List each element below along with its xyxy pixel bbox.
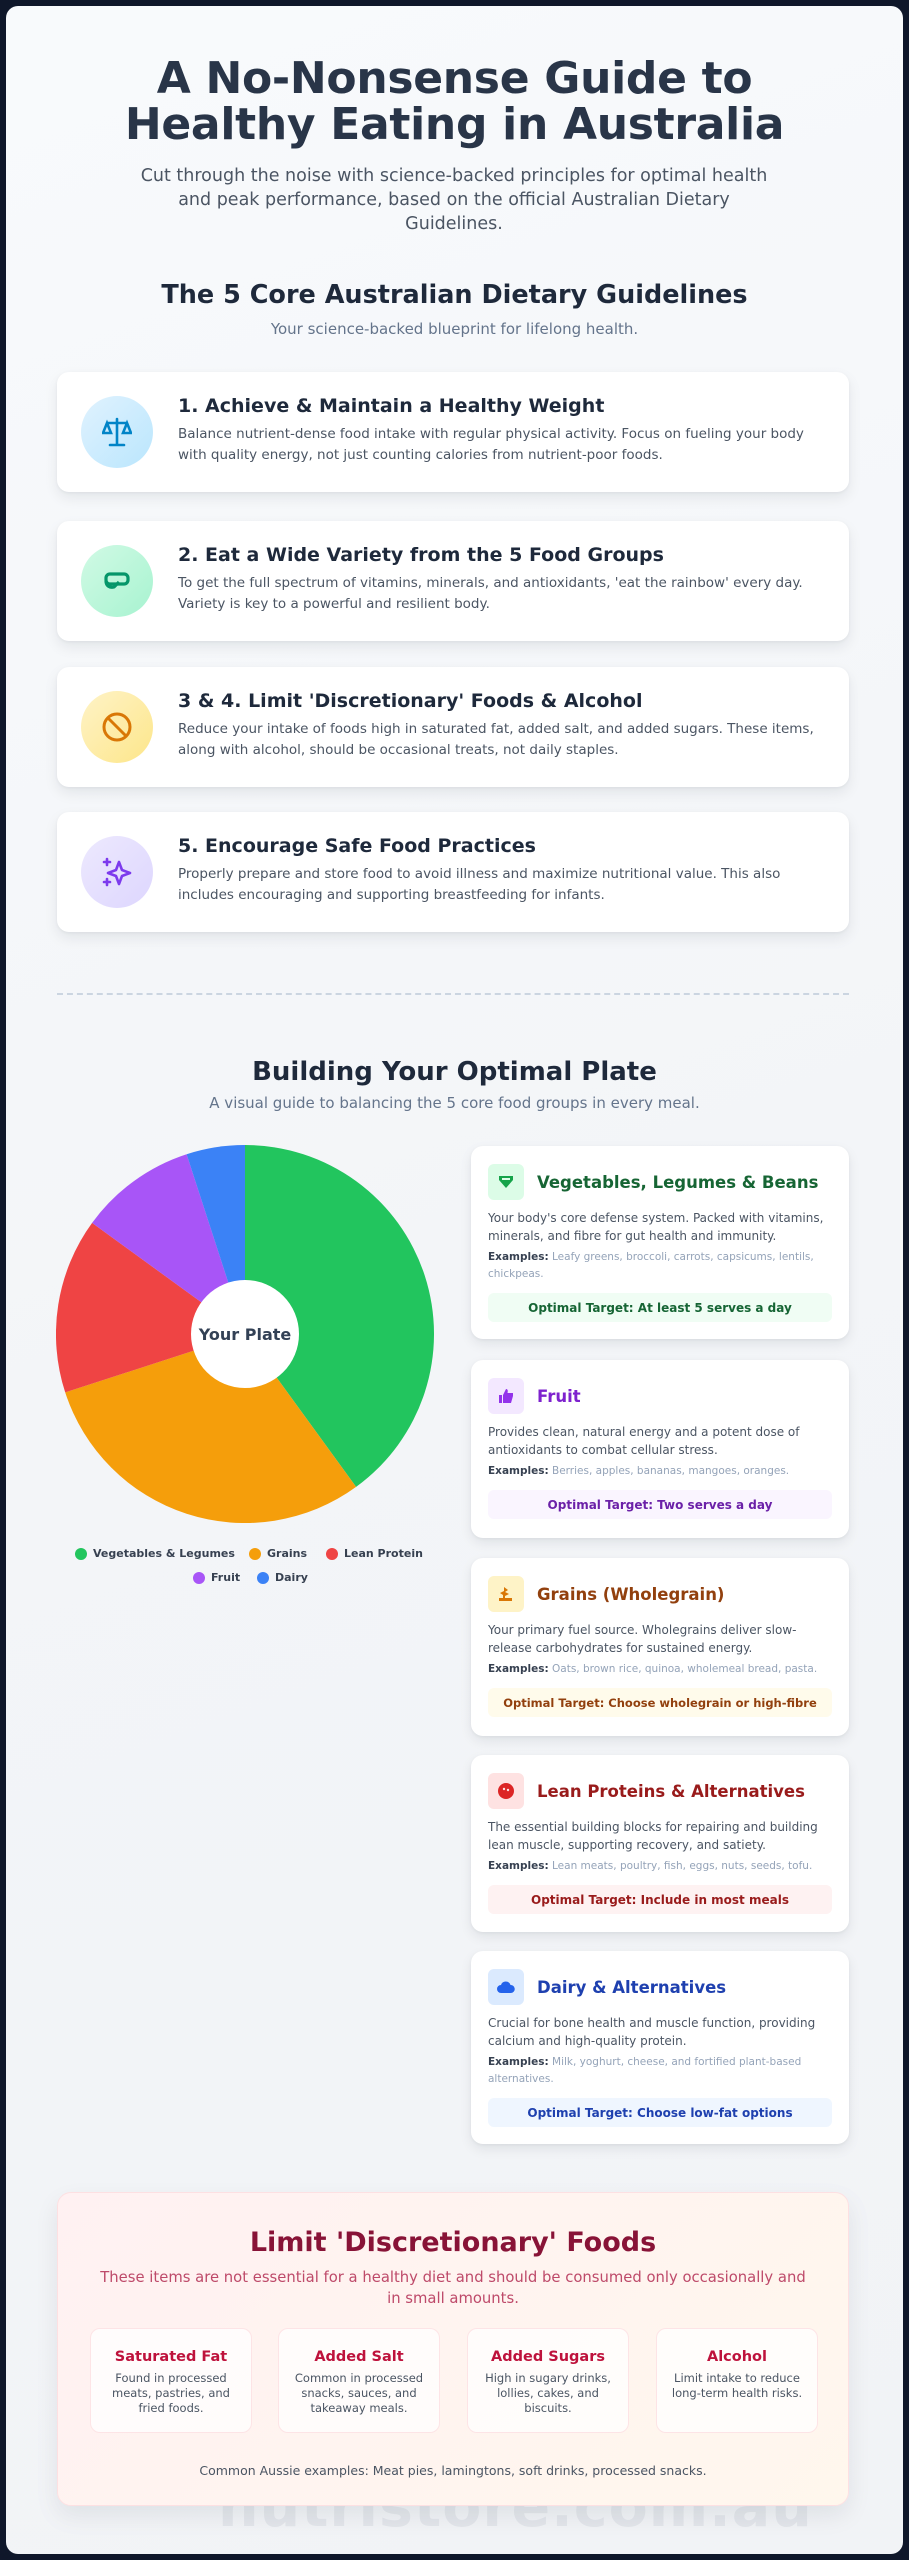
panel: grains: Examples: Oats, brown rice, quinoa, wholemeal bread, pasta. xyxy=(488,1663,817,1675)
icon: handshake xyxy=(81,545,153,617)
panel: grains: Grains (Wholegrain) xyxy=(537,1584,724,1604)
panel: dairy: Crucial for bone health and muscle function, providing calcium and high-quality protein. xyxy=(488,2016,815,2048)
card: saturated fat xyxy=(90,2328,252,2433)
heading: Limit 'Discretionary' Foods xyxy=(250,2227,656,2258)
panel: lean proteins xyxy=(471,1755,849,1932)
chart: plate pie: Your Plate xyxy=(198,1325,291,1344)
description: in small amounts. xyxy=(387,2290,519,2307)
panel: vegetables: Vegetables, Legumes & Beans xyxy=(537,1172,818,1192)
panel: lean proteins: The essential building blocks for repairing and building lean muscle, supporting recovery, and satiety. xyxy=(488,1820,818,1852)
chart: plate pie xyxy=(56,1145,434,1523)
panel: guideline 5 xyxy=(57,812,849,932)
card: added salt: Common in processed snacks, sauces, and takeaway meals. xyxy=(295,2371,423,2415)
description: These items are not essential for a healthy diet and should be consumed only occasionally and xyxy=(100,2269,806,2286)
legend: Grains xyxy=(267,1547,307,1560)
panel: guideline 1 xyxy=(57,372,849,492)
card: saturated fat: Found in processed meats, pastries, and fried foods. xyxy=(112,2371,230,2415)
panel: vegetables xyxy=(471,1146,849,1339)
subheading: Your science-backed blueprint for lifelong health. xyxy=(271,320,638,338)
panel: fruit: Examples: Berries, apples, bananas, mangoes, oranges. xyxy=(488,1465,789,1477)
panel: guideline 1: Balance nutrient-dense food intake with regular physical activity. Focus on fueling your body with quality energy, not just counting calories from nutrient-poor foods. xyxy=(178,426,804,463)
panel: lean proteins: Optimal Target: Include in most meals xyxy=(531,1892,789,1906)
panel: guideline 5: Properly prepare and store food to avoid illness and maximize nutritional value. This also includes encouraging and supporting breastfeeding for infants. xyxy=(178,866,780,903)
panel: dairy: Optimal Target: Choose low-fat options xyxy=(527,2106,793,2120)
icon: prohibited xyxy=(81,691,153,763)
panel: dairy: Dairy & Alternatives xyxy=(537,1978,726,1996)
panel: vegetables: Examples: Leafy greens, broccoli, carrots, capsicums, lentils, chickpeas. xyxy=(488,1251,814,1280)
panel: guideline 3 & 4: 3 & 4. Limit 'Discretionary' Foods & Alcohol xyxy=(178,690,642,712)
heading: 5 core guidelines: The 5 Core Australian Dietary Guidelines xyxy=(161,280,748,310)
description xyxy=(100,2269,806,2307)
footer note: Common Aussie examples: Meat pies, lamingtons, soft drinks, processed snacks. xyxy=(199,2463,707,2478)
panel: lean proteins: Examples: Lean meats, poultry, fish, eggs, nuts, seeds, tofu. xyxy=(488,1860,812,1872)
panel: lean proteins: Lean Proteins & Alternatives xyxy=(537,1782,805,1800)
panel: guideline 3 & 4 xyxy=(57,667,849,787)
subtitle: and peak performance, based on the official Australian Dietary xyxy=(178,190,730,210)
panel: vegetables: Optimal Target: At least 5 serves a day xyxy=(528,1300,792,1314)
legend: Vegetables & Legumes xyxy=(93,1547,235,1560)
panel: guideline 1: 1. Achieve & Maintain a Healthy Weight xyxy=(178,395,604,417)
card: alcohol: Limit intake to reduce long-term health risks. xyxy=(672,2371,802,2400)
panel: grains: Your primary fuel source. Wholegrains deliver slow-release carbohydrates for sustained energy. xyxy=(488,1623,796,1655)
title: A No-Nonsense Guide to xyxy=(157,53,752,104)
panel: fruit: Provides clean, natural energy and a potent dose of antioxidants to combat cellular stress. xyxy=(488,1425,799,1457)
icon: scale xyxy=(81,396,153,468)
card: added sugars: Added Sugars xyxy=(491,2349,605,2365)
heading: building your optimal plate: Building Your Optimal Plate xyxy=(252,1057,657,1087)
panel: dairy xyxy=(471,1951,849,2144)
card: saturated fat: Saturated Fat xyxy=(115,2349,227,2365)
panel: guideline 3 & 4: Reduce your intake of foods high in saturated fat, added salt, and added sugars. These items, along with alcohol, should be occasional treats, not daily staples. xyxy=(178,721,814,758)
panel: fruit: Optimal Target: Two serves a day xyxy=(548,1498,772,1512)
card: added sugars xyxy=(467,2328,629,2433)
legend: Fruit xyxy=(211,1571,240,1584)
legend: Dairy xyxy=(275,1571,308,1584)
subtitle: Guidelines. xyxy=(405,214,503,234)
card: alcohol: Alcohol xyxy=(707,2349,767,2365)
card: added salt: Added Salt xyxy=(314,2349,404,2365)
panel: grains xyxy=(471,1558,849,1736)
icon: sparkles xyxy=(81,836,153,908)
legend xyxy=(75,1547,423,1584)
panel: guideline 2 xyxy=(57,521,849,641)
panel: guideline 5: 5. Encourage Safe Food Practices xyxy=(178,835,536,857)
subtitle: Cut through the noise with science-backed principles for optimal health xyxy=(141,166,767,186)
panel: vegetables: Your body's core defense system. Packed with vitamins, minerals, and fibre for gut health and immunity. xyxy=(488,1211,823,1243)
panel: guideline 2: 2. Eat a Wide Variety from the 5 Food Groups xyxy=(178,544,664,566)
title xyxy=(125,53,784,150)
title: Healthy Eating in Australia xyxy=(125,99,784,150)
panel: fruit xyxy=(471,1360,849,1538)
card: added sugars: High in sugary drinks, lollies, cakes, and biscuits. xyxy=(485,2371,611,2415)
legend: Lean Protein xyxy=(344,1547,423,1560)
panel: dairy: Examples: Milk, yoghurt, cheese, and fortified plant-based alternatives. xyxy=(488,2056,801,2085)
panel: guideline 2: To get the full spectrum of vitamins, minerals, and antioxidants, 'eat the rainbow' every day. Variety is key to a powerful and resilient body. xyxy=(178,575,803,612)
panel: fruit: Fruit xyxy=(537,1386,581,1406)
panel: limit discretionary foods xyxy=(57,2192,849,2506)
card: alcohol xyxy=(656,2328,818,2433)
watermark: nutristore.com.au xyxy=(218,2474,813,2540)
card: added salt xyxy=(278,2328,440,2433)
panel: grains: Optimal Target: Choose wholegrain or high-fibre xyxy=(503,1696,817,1710)
subheading: A visual guide to balancing the 5 core food groups in every meal. xyxy=(209,1094,700,1112)
subtitle xyxy=(141,166,767,234)
